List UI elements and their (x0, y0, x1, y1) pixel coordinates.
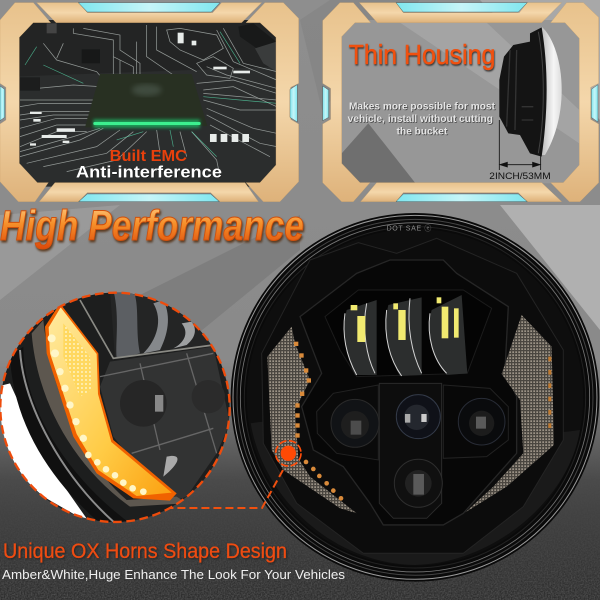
cyan light bars (0, 3, 297, 202)
dimension arrow (499, 120, 541, 170)
main chip (85, 74, 207, 127)
inset: amber turn signal close-up (0, 290, 233, 527)
DOT SAE mark: DOT SAE ⓔ (387, 225, 432, 233)
gold frame (323, 3, 599, 202)
text block: description: Makes more possible for most (349, 102, 496, 113)
text block: description: the bucket (397, 126, 448, 137)
high beam lenses (344, 295, 467, 376)
caption: Amber&White,Huge Enhance The Look For Your Vehicles (2, 568, 345, 582)
circuit board image (13, 20, 280, 187)
high beam window (325, 290, 492, 377)
amber LED (45, 303, 177, 501)
housing rim stripes (0, 383, 90, 523)
lamp body (247, 229, 583, 566)
callout line (170, 470, 283, 508)
low beam modules (317, 383, 508, 518)
turn signal: right (465, 315, 554, 513)
body contour (262, 238, 563, 553)
panel: built EMC circuit board (0, 3, 299, 202)
text: anti-interference: Anti-interference (76, 162, 222, 181)
panel fill (340, 20, 582, 183)
headlight front view (231, 213, 599, 582)
small chips (20, 23, 278, 91)
green glow (93, 119, 200, 128)
text block: description: vehicle, install without cutting (348, 114, 493, 125)
icon: headlight side view (499, 27, 562, 157)
inset image (0, 290, 233, 527)
text block: description (348, 102, 496, 137)
central mask (300, 260, 517, 525)
panel: thin housing (323, 3, 599, 202)
cyan light bars (323, 3, 598, 202)
heading: unique OX horns: Unique OX Horns Shape Design (3, 540, 287, 563)
callout marker (276, 441, 301, 466)
bezel rings (231, 213, 599, 582)
dashed circle outline (0, 293, 230, 522)
gold frame (0, 3, 299, 202)
heading: built EMC: Built EMC (110, 148, 187, 165)
dimension label: 2INCH/53MM (489, 171, 551, 181)
heading: thin housing: Thin Housing (349, 39, 495, 70)
heading: high performance: High Performance (0, 202, 304, 250)
turn signal: left (267, 327, 357, 513)
